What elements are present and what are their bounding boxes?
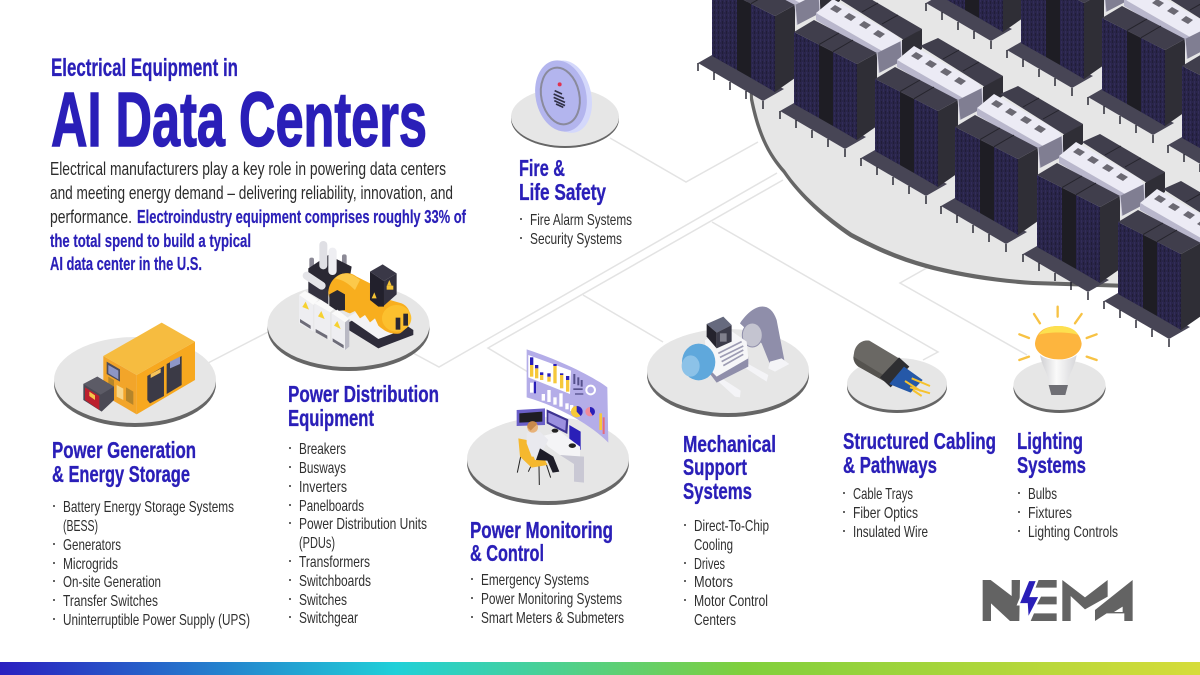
list: lighting	[1018, 486, 1118, 541]
list: mechanical	[684, 518, 769, 629]
disc: lighting	[1014, 360, 1106, 413]
heading: fire and life safety: Fire &	[519, 155, 565, 181]
intro paragraph: performance.	[50, 206, 132, 227]
heading: power generation: Power Generation	[52, 437, 196, 463]
panel: fire and life safety	[511, 56, 632, 248]
list: power generation: On-site Generation	[63, 574, 161, 591]
heading: power generation	[52, 437, 196, 487]
panel: power distribution equipment	[268, 241, 439, 627]
title block	[50, 54, 467, 274]
panel: lighting systems	[1014, 307, 1118, 541]
list: power generation: Microgrids	[63, 556, 118, 573]
subtitle: Electrical Equipment in	[51, 54, 238, 82]
disc: generation	[54, 337, 216, 427]
list: power generation: Uninterruptible Power Supply (UPS)	[63, 612, 250, 629]
data center server floor illustration	[698, 0, 1200, 347]
heading: cabling: & Pathways	[843, 452, 937, 478]
connector lines	[208, 138, 1027, 372]
list: power monitoring	[471, 572, 624, 627]
intro paragraph: and meeting energy demand – delivering reliability, innovation, and	[50, 182, 453, 203]
list: lighting: Fixtures	[1028, 505, 1072, 522]
heading: power generation: & Energy Storage	[52, 461, 190, 487]
list: power distribution: Switchboards	[299, 573, 371, 590]
intro paragraph	[50, 158, 467, 274]
intro paragraph: Electrical manufacturers play a key role in powering data centers	[50, 158, 446, 179]
heading: lighting	[1017, 428, 1086, 478]
list: power generation	[53, 499, 250, 629]
list: power monitoring: Emergency Systems	[481, 572, 589, 589]
list: power distribution: Switches	[299, 592, 347, 609]
panel: mechanical support systems	[647, 307, 809, 629]
disc: cabling	[847, 358, 947, 413]
heading: fire and life safety	[519, 155, 606, 205]
heading: lighting: Systems	[1017, 452, 1086, 478]
list: power distribution: Inverters	[299, 479, 347, 496]
intro paragraph: AI data center in the U.S.	[50, 253, 202, 274]
heading: power distribution: Equipment	[288, 405, 374, 431]
icon: fiber cable	[853, 340, 930, 396]
disc: fire	[511, 88, 619, 148]
heading: power monitoring: & Control	[470, 540, 544, 566]
heading: power distribution	[288, 381, 439, 431]
heading: mechanical: Systems	[683, 478, 752, 504]
icon: power distribution equipment	[299, 241, 413, 350]
list: power distribution	[289, 441, 427, 627]
list: lighting: Bulbs	[1028, 486, 1057, 503]
heading: mechanical: Mechanical	[683, 431, 776, 457]
logo: NEMA	[983, 580, 1133, 621]
icon: monitoring workstation	[517, 349, 608, 485]
list: power generation: (BESS)	[63, 518, 98, 535]
list: power distribution: Power Distribution Units	[299, 516, 427, 533]
list: mechanical: Motor Control	[694, 593, 768, 610]
list: cabling	[843, 486, 928, 541]
list: fire and life safety	[520, 212, 632, 248]
heading: cabling	[843, 428, 996, 478]
list: cabling: Insulated Wire	[853, 524, 928, 541]
list: power distribution: Panelboards	[299, 498, 364, 515]
list: power distribution: (PDUs)	[299, 535, 335, 552]
heading: mechanical	[683, 431, 776, 504]
icon: light bulb	[1019, 307, 1097, 395]
list: power generation: Generators	[63, 537, 121, 554]
heading: fire and life safety: Life Safety	[519, 179, 606, 205]
list: power distribution: Busways	[299, 460, 346, 477]
heading: lighting: Lighting	[1017, 428, 1083, 454]
list: mechanical: Drives	[694, 556, 725, 573]
list: power distribution: Breakers	[299, 441, 346, 458]
panel: structured cabling and pathways	[843, 340, 996, 541]
panel: power monitoring and control	[467, 349, 629, 627]
list: fire and life safety: Fire Alarm Systems	[530, 212, 632, 229]
list: mechanical: Centers	[694, 612, 736, 629]
list: mechanical: Motors	[694, 574, 733, 591]
list: power monitoring: Power Monitoring Systems	[481, 591, 622, 608]
list: power distribution: Transformers	[299, 554, 370, 571]
icon: electric motor	[682, 307, 789, 397]
intro paragraph: Electroindustry equipment comprises roughly 33% of	[137, 206, 467, 227]
list: cabling: Fiber Optics	[853, 505, 918, 522]
list: power generation: Battery Energy Storage Systems	[63, 499, 234, 516]
list: mechanical: Cooling	[694, 537, 733, 554]
heading: power distribution: Power Distribution	[288, 381, 439, 407]
list: mechanical: Direct-To-Chip	[694, 518, 769, 535]
list: lighting: Lighting Controls	[1028, 524, 1118, 541]
main title: AI Data Centers	[51, 77, 427, 163]
heading: mechanical: Support	[683, 454, 747, 480]
list: power distribution: Switchgear	[299, 610, 358, 627]
panel: power generation and energy storage	[52, 323, 250, 629]
heading: power monitoring: Power Monitoring	[470, 517, 613, 543]
icon: smoke detector	[529, 56, 598, 138]
list: cabling: Cable Trays	[853, 486, 913, 503]
list: power generation: Transfer Switches	[63, 593, 158, 610]
disc: distribution	[268, 283, 430, 371]
disc: mechanical	[647, 329, 809, 417]
icon: generator and battery	[83, 323, 195, 414]
list: fire and life safety: Security Systems	[530, 231, 622, 248]
list: power monitoring: Smart Meters & Submeters	[481, 610, 624, 627]
intro paragraph: the total spend to build a typical	[50, 230, 251, 251]
heading: cabling: Structured Cabling	[843, 428, 996, 454]
gradient footer bar	[0, 662, 1200, 675]
disc: monitoring	[467, 417, 629, 505]
heading: power monitoring	[470, 517, 613, 566]
